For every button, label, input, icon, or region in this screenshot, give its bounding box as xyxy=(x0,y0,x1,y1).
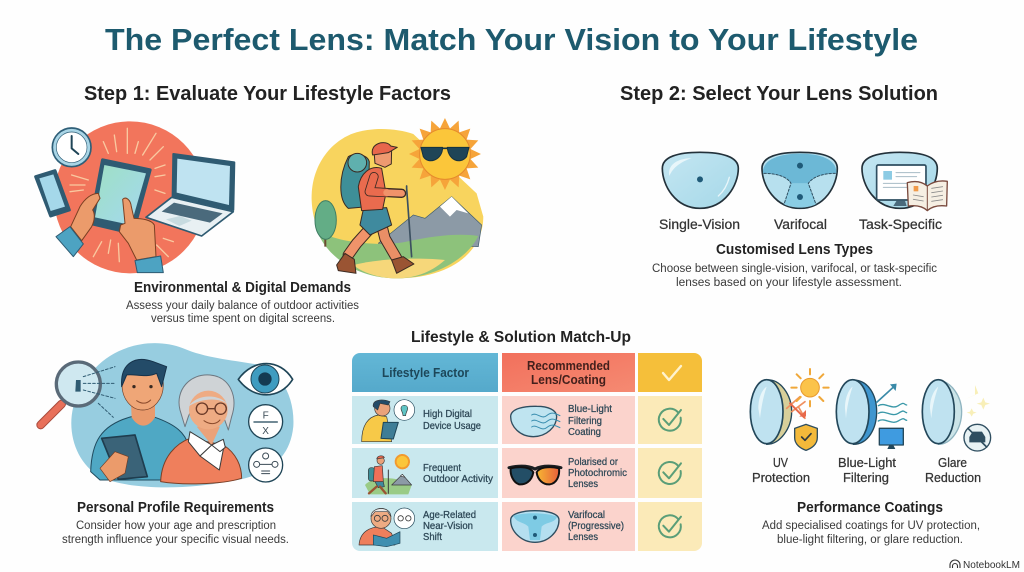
icon: clock xyxy=(52,128,91,167)
row labels: recommended lenses: Lenses xyxy=(568,479,598,490)
icon: profile nodes xyxy=(249,448,283,482)
row backgrounds xyxy=(352,396,702,551)
coating labels: UV xyxy=(773,456,789,470)
column header: recommended lens: Recommended xyxy=(527,359,610,373)
icon: blue-light lens xyxy=(511,406,560,437)
row labels: lifestyle factors: Device Usage xyxy=(423,421,481,432)
icon: prescription: F xyxy=(263,410,269,421)
coating labels xyxy=(752,456,981,485)
mountains xyxy=(378,197,482,247)
text block: performance coatings: Performance Coatings xyxy=(797,500,943,516)
icon: uv protection xyxy=(750,369,829,450)
lens types row xyxy=(662,152,947,211)
coating labels: Blue-Light xyxy=(838,456,897,470)
icon: glare reduction xyxy=(922,380,991,451)
icon: tablet xyxy=(91,160,150,233)
coating labels: Glare xyxy=(938,456,967,470)
icon: prescription xyxy=(249,405,283,439)
row labels: lifestyle factors xyxy=(423,409,493,543)
hiker xyxy=(337,143,414,273)
rear leg xyxy=(348,227,372,255)
text block: personal profile requirements: strength influence your specific visual needs. xyxy=(62,534,289,546)
row labels: recommended lenses: Photochromic xyxy=(568,468,627,479)
title: The Perfect Lens: Match Your Vision to Your Lifestyle xyxy=(105,22,918,57)
table: lifestyle and solution match-up xyxy=(352,353,702,551)
icon: blue-light filtering xyxy=(836,380,907,449)
text block: environmental and digital demands: Assess your daily balance of outdoor activities xyxy=(126,300,359,312)
boots xyxy=(337,253,356,273)
text block: environmental and digital demands xyxy=(126,280,359,325)
row labels: recommended lenses: Polarised or xyxy=(568,457,619,468)
icon: sunglasses xyxy=(509,466,561,484)
row labels: recommended lenses: Blue-Light xyxy=(568,404,612,415)
heading: step 2: Step 2: Select Your Lens Solution xyxy=(620,83,938,105)
icon: phone xyxy=(36,171,69,216)
lens type labels: Task-Specific xyxy=(859,217,942,232)
coating labels: Reduction xyxy=(925,471,981,485)
row labels: recommended lenses: Filtering xyxy=(568,416,602,427)
column header: recommended lens: Lens/Coating xyxy=(531,373,606,387)
icon: prescription: X xyxy=(262,426,269,437)
icon: older man reading xyxy=(359,508,415,547)
text block: performance coatings xyxy=(762,500,980,546)
icon: person with tablet xyxy=(362,400,415,442)
NotebookLM watermark: NotebookLM xyxy=(963,559,1020,571)
icon: task-specific lens xyxy=(862,152,947,211)
arm xyxy=(369,177,402,193)
icon: check marks xyxy=(659,409,681,537)
text block: environmental and digital demands: versus time spent on digital screens. xyxy=(151,313,335,325)
text block: performance coatings: Add specialised coatings for UV protection, xyxy=(762,520,980,532)
icon: single-vision lens xyxy=(662,152,738,208)
head xyxy=(374,149,392,167)
icon: hands xyxy=(56,193,163,273)
column header: lifestyle factor: Lifestyle Factor xyxy=(382,366,469,380)
text block: performance coatings: blue-light filtering, or glare reduction. xyxy=(777,534,963,546)
row labels: lifestyle factors: High Digital xyxy=(423,409,472,420)
row labels: lifestyle factors: Frequent xyxy=(423,463,461,474)
icon: sun with sunglasses xyxy=(409,118,481,190)
icon: laptop xyxy=(146,154,234,236)
icon: eye xyxy=(238,364,293,395)
icon: magnifying glass xyxy=(41,362,115,425)
column header: lifestyle factor xyxy=(352,353,498,392)
coating icons xyxy=(750,369,991,451)
row labels: recommended lenses: Coating xyxy=(568,427,601,438)
row labels: recommended lenses: Varifocal xyxy=(568,510,605,521)
row labels: recommended lenses: Lenses xyxy=(568,532,598,543)
row labels: lifestyle factors: Shift xyxy=(423,532,442,543)
tree xyxy=(315,201,336,247)
icon: varifocal lens xyxy=(511,511,559,542)
illustration: personal profile xyxy=(41,343,293,487)
backpack xyxy=(341,155,369,208)
row labels: lifestyle factors: Age-Related xyxy=(423,510,476,521)
young man xyxy=(91,359,188,482)
lens type labels xyxy=(659,217,942,232)
row labels: lifestyle factors: Outdoor Activity xyxy=(423,474,493,485)
icon: varifocal lens xyxy=(762,152,837,208)
hills xyxy=(317,230,478,278)
lens type labels: Varifocal xyxy=(774,217,827,232)
illustration: hiker outdoors xyxy=(312,118,483,278)
text block: personal profile requirements: Personal Profile Requirements xyxy=(77,500,274,516)
front leg xyxy=(382,225,397,258)
illustration: digital devices xyxy=(36,121,234,273)
text block: environmental and digital demands: Environmental & Digital Demands xyxy=(134,280,351,296)
text block: personal profile requirements xyxy=(62,500,289,546)
row labels: lifestyle factors: Near-Vision xyxy=(423,521,473,532)
shorts xyxy=(360,208,392,235)
lens type labels: Single-Vision xyxy=(659,217,740,232)
icon: small hiker xyxy=(365,455,412,494)
torso xyxy=(358,168,386,211)
column header: check xyxy=(638,353,702,392)
text block: customised lens types xyxy=(652,242,937,289)
coating labels: Filtering xyxy=(843,471,889,485)
heading: match-up table: Lifestyle & Solution Match-Up xyxy=(411,329,631,346)
coating labels: Protection xyxy=(752,471,810,485)
column header: recommended lens xyxy=(502,353,635,392)
heading: step 1: Step 1: Evaluate Your Lifestyle Factors xyxy=(84,83,451,105)
older woman xyxy=(161,375,242,484)
text block: customised lens types: lenses based on your lifestyle assessment. xyxy=(676,277,902,289)
row labels: recommended lenses: (Progressive) xyxy=(568,521,624,532)
text block: customised lens types: Choose between single-vision, varifocal, or task-specific xyxy=(652,263,937,275)
text block: customised lens types: Customised Lens Types xyxy=(716,242,873,258)
row labels: recommended lenses xyxy=(568,404,627,543)
text block: personal profile requirements: Consider how your age and prescription xyxy=(76,520,276,532)
